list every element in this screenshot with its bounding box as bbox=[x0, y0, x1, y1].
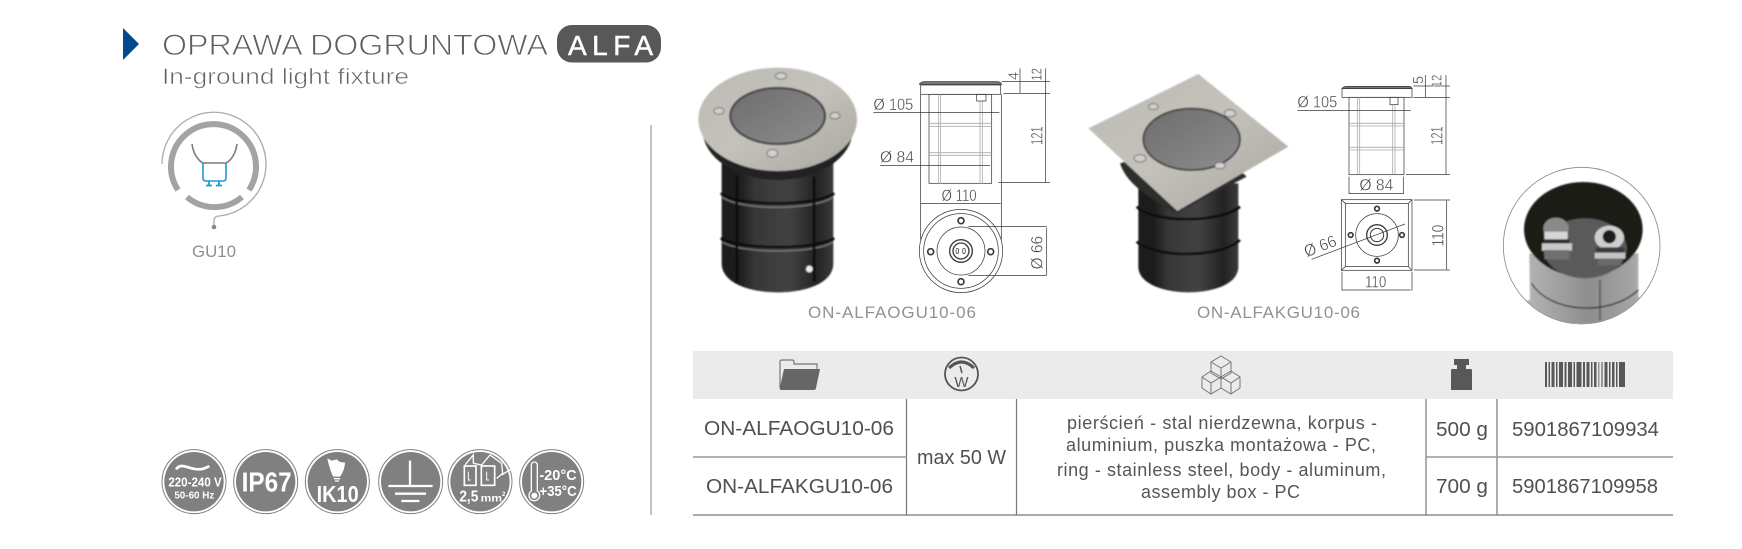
table header band bbox=[693, 351, 1673, 399]
icon: earth ground bbox=[379, 450, 443, 514]
product photo: round fixture bbox=[698, 68, 857, 292]
caption: ON-ALFAOGU10-06: ON-ALFAOGU10-06 bbox=[808, 303, 976, 322]
subtitle: In-ground light fixture bbox=[162, 64, 409, 89]
icon: weight bbox=[1451, 359, 1472, 390]
dimensions: Ø 66 bbox=[1027, 236, 1046, 269]
gland right bbox=[1595, 226, 1625, 265]
icon: temperature -20 +35 C bbox=[520, 450, 584, 514]
side view bbox=[1342, 86, 1412, 175]
section marker triangle bbox=[123, 28, 139, 60]
icon: IP67: IP67 bbox=[242, 466, 292, 497]
product code 2: ON-ALFAKGU10-06 bbox=[706, 476, 893, 498]
dimensions: Ø 110 bbox=[942, 186, 977, 205]
material description: assembly box - PC bbox=[1141, 482, 1300, 502]
weight 2: 700 g bbox=[1436, 476, 1488, 498]
vertical divider bbox=[650, 125, 652, 515]
detail photo: junction box bbox=[1503, 167, 1660, 327]
icon: wattage meter: W bbox=[954, 374, 969, 391]
icon: voltage 220-240 V 50-60 Hz bbox=[162, 450, 226, 514]
dimensions: Ø 105 bbox=[873, 95, 913, 114]
icon: terminal 2,5 mm2: 2,5 bbox=[459, 489, 479, 506]
bottom view bbox=[919, 209, 1003, 293]
material description bbox=[1057, 413, 1386, 502]
EAN 1: 5901867109934 bbox=[1512, 419, 1659, 441]
icon: terminal 2,5 mm2: mm bbox=[481, 493, 502, 504]
technical drawing: round fixture bbox=[873, 68, 1050, 293]
icon: wattage meter bbox=[945, 358, 978, 391]
dimensions: Ø 84 bbox=[1359, 175, 1393, 194]
badge: ALFA bbox=[557, 25, 661, 62]
dimensions: 5 bbox=[1411, 76, 1427, 84]
specification table bbox=[693, 351, 1673, 515]
icon: GU10 bulb bbox=[162, 112, 266, 229]
dimensions: 110 bbox=[1428, 225, 1447, 247]
dimensions: 12 bbox=[1430, 75, 1446, 87]
icon: material cubes bbox=[1202, 356, 1240, 394]
icon: terminal 2,5 mm2: 2 bbox=[502, 492, 506, 498]
weight 1: 500 g bbox=[1436, 419, 1488, 441]
feature icons row bbox=[162, 450, 584, 514]
caption: ON-ALFAKGU10-06: ON-ALFAKGU10-06 bbox=[1197, 303, 1360, 322]
material description: pierścień - stal nierdzewna, korpus - bbox=[1067, 413, 1377, 433]
dimensions: 12 bbox=[1030, 68, 1046, 81]
dimensions: Ø 105 bbox=[1297, 92, 1337, 111]
dimensions: 121 bbox=[1428, 126, 1447, 145]
material description: ring - stainless steel, body - aluminum, bbox=[1057, 460, 1386, 480]
table grid lines bbox=[693, 399, 1673, 515]
dimensions: Ø 66 bbox=[1301, 231, 1339, 261]
side view bbox=[919, 82, 1002, 240]
technical drawing: square fixture bbox=[1297, 75, 1450, 291]
dimensions: 4 bbox=[1006, 72, 1022, 80]
bottom view bbox=[1341, 200, 1412, 270]
icon: temperature -20 +35 C: -20°C bbox=[539, 468, 577, 484]
dimensions bbox=[1297, 75, 1450, 291]
gland left bbox=[1542, 218, 1572, 259]
icon: IP67 bbox=[234, 450, 298, 514]
icon: terminal 2,5 mm2 bbox=[448, 450, 512, 514]
product code 1: ON-ALFAOGU10-06 bbox=[704, 418, 894, 440]
icon: voltage 220-240 V 50-60 Hz: 50-60 Hz bbox=[174, 491, 214, 502]
icon: IK10: IK10 bbox=[317, 481, 359, 507]
dimensions: 110 bbox=[1365, 272, 1386, 291]
icon: temperature -20 +35 C: +35°C bbox=[539, 484, 577, 500]
icon: IK10 bbox=[305, 450, 369, 514]
product photo: square fixture bbox=[1088, 74, 1288, 292]
icon: folder bbox=[780, 360, 820, 390]
GU10 label: GU10 bbox=[192, 242, 236, 261]
title: OPRAWA DOGRUNTOWA bbox=[162, 29, 548, 62]
EAN 2: 5901867109958 bbox=[1512, 476, 1658, 498]
dimensions bbox=[873, 68, 1050, 276]
power: max 50 W bbox=[917, 447, 1006, 469]
icon: barcode bbox=[1545, 362, 1625, 387]
badge: ALFA: ALFA bbox=[568, 30, 653, 61]
dimensions: 121 bbox=[1027, 126, 1046, 145]
dimensions: Ø 84 bbox=[880, 148, 914, 167]
material description: aluminium, puszka montażowa - PC, bbox=[1066, 435, 1376, 455]
icon: voltage 220-240 V 50-60 Hz: 220-240 V bbox=[168, 476, 222, 490]
